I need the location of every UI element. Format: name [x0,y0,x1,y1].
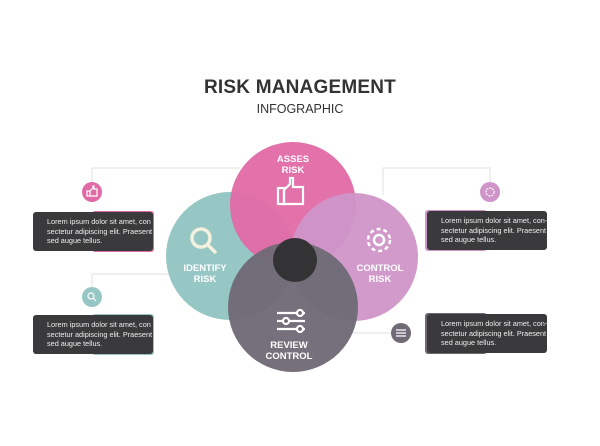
text box: left bottom [33,315,153,354]
text box: left top: sed augue tellus. [47,236,102,245]
text box: left top: sectetur adipiscing elit. Praesent [47,227,152,236]
labels: ASSES [277,154,309,165]
text box: left bottom: Lorem ipsum dolor sit amet, con [47,320,151,329]
text box: left bottom: sed augue tellus. [47,339,102,348]
labels: REVIEW [270,340,308,351]
labels [183,154,404,362]
title: RISK MANAGEMENT [204,77,396,98]
icon: gear [368,229,390,251]
text box: left bottom: sectetur adipiscing elit. Praesent [47,330,152,339]
icon: sliders [277,310,305,332]
text box: right top: Lorem ipsum dolor sit amet, con- [441,216,547,225]
icon: thumbs up [278,178,303,204]
text box: right top: sectetur adipiscing elit. Praesent [441,226,546,235]
box accents [92,211,154,252]
text box: left top: Lorem ipsum dolor sit amet, con [47,217,151,226]
labels: RISK [194,274,216,285]
circle: asses risk [230,142,356,268]
labels: CONTROL [266,351,313,362]
center dot [273,238,317,282]
icon: magnifier [192,229,216,253]
text box: right bottom: sed augue tellus. [441,338,496,347]
labels: RISK [282,165,304,176]
labels: RISK [369,274,391,285]
text box: left top [33,212,153,251]
circle: review control [228,242,358,372]
small icons [82,182,102,202]
labels: CONTROL [357,263,404,274]
text box: right bottom: Lorem ipsum dolor sit amet, con- [441,319,547,328]
text box: right top: sed augue tellus. [441,235,496,244]
text box: right bottom [427,314,547,353]
subtitle: INFOGRAPHIC [257,102,343,116]
text box: right top [427,211,547,250]
circle: control risk [290,193,418,321]
connector lines [92,168,490,333]
labels: IDENTIFY [183,263,227,274]
text box: right bottom: sectetur adipiscing elit. Praesent [441,329,546,338]
circle: identify risk [166,192,294,320]
